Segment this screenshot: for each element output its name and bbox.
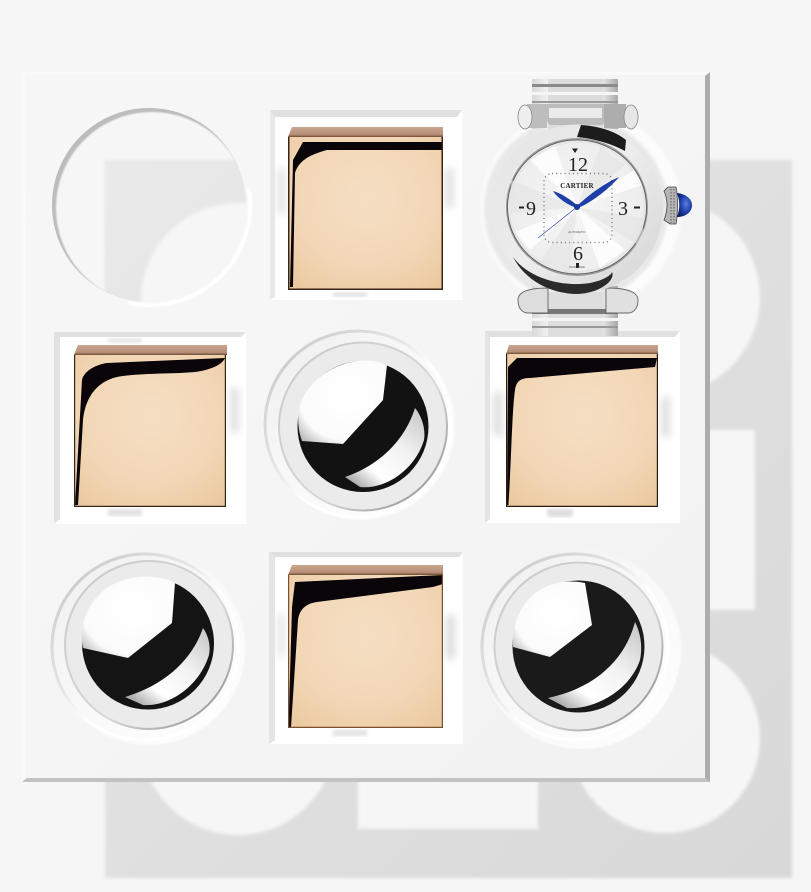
round well: bottom left: [51, 551, 245, 745]
hands: [538, 207, 577, 238]
white board with circular cut-out: [22, 72, 710, 782]
bracelet bottom: [532, 286, 618, 336]
circular cut-out rim: [51, 107, 253, 309]
dial: 6: [573, 243, 583, 265]
ball: [82, 578, 214, 710]
cast shadow of the board: [105, 160, 792, 878]
case reflection: bottom: [513, 257, 613, 294]
minute track: [544, 174, 612, 242]
gold block: top centre: [288, 127, 443, 290]
dial: 9: [526, 198, 536, 220]
board left edge: [22, 72, 25, 782]
board right edge: [705, 72, 710, 782]
guilloche facets: [511, 147, 643, 271]
brand: CARTIER: [560, 182, 594, 190]
dial: SWISS MADE: [569, 266, 585, 269]
halo behind watch: [481, 109, 681, 309]
case reflection: top right: [577, 125, 626, 151]
recess: bottom centre square: [269, 552, 463, 744]
recess: middle right square: [485, 331, 680, 523]
recess: middle left square: [54, 332, 246, 524]
ball: [298, 361, 428, 492]
bracelet top: [532, 79, 618, 129]
bezel: [506, 138, 648, 276]
gold block: middle right: [506, 345, 658, 507]
hour markers: [519, 148, 640, 268]
gold block: middle left: [74, 345, 227, 507]
board top edge: [22, 72, 710, 75]
ball: [512, 580, 644, 712]
board bottom edge: [22, 778, 710, 782]
watch: [481, 79, 692, 336]
recess: top centre square: [270, 110, 462, 300]
round well: centre: [265, 330, 455, 520]
numerals: 12: [568, 154, 588, 176]
dial small print: AUTOMATIC: [568, 230, 587, 234]
dial: [510, 143, 644, 271]
round well: bottom right: [481, 549, 681, 749]
gold block: bottom centre: [288, 565, 443, 728]
crown: [664, 187, 692, 224]
case: [492, 124, 663, 294]
lug caps bottom: [518, 288, 638, 313]
lug caps top: [518, 104, 638, 129]
dial: 3: [618, 198, 628, 220]
